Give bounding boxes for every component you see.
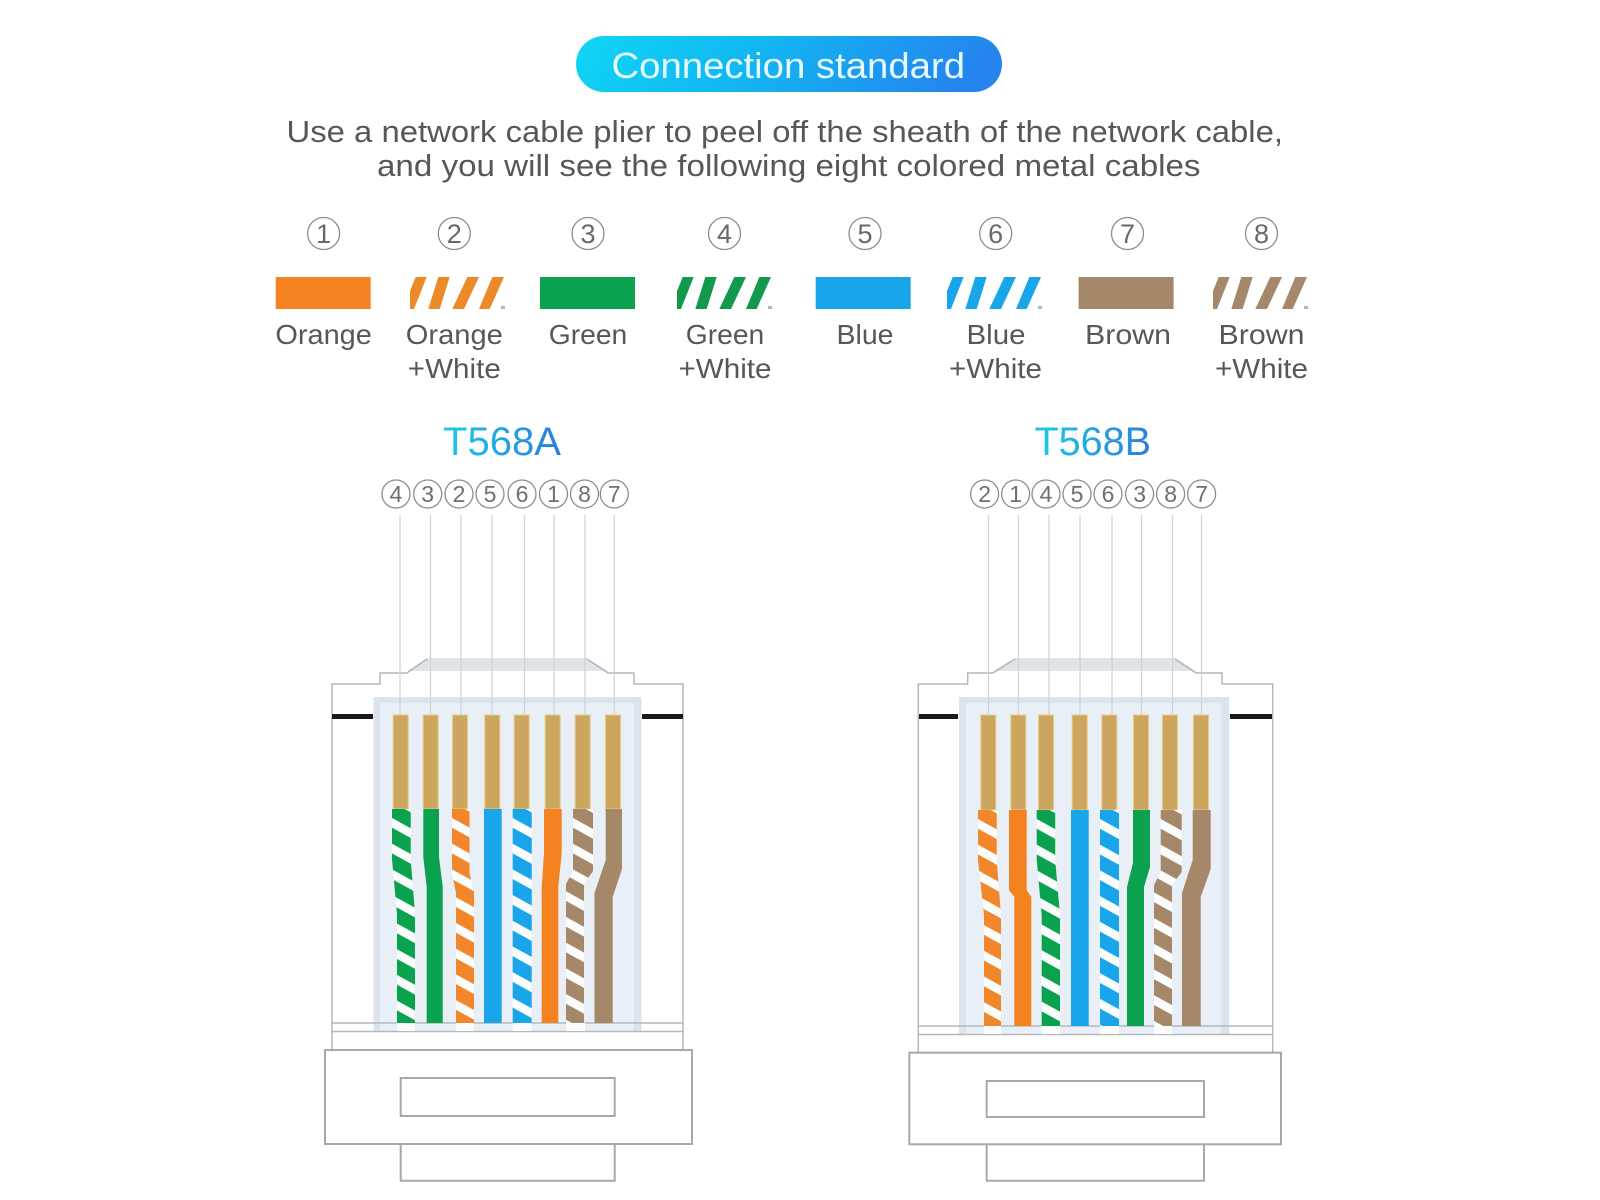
legend item 7: brown	[1079, 218, 1174, 350]
heading: T568B: T568B	[1034, 420, 1151, 464]
T568A pin order numbers: 6	[516, 481, 528, 507]
T568A pin order numbers: 1	[547, 481, 560, 507]
connector A housing	[332, 658, 683, 1050]
legend item 3: green: 3	[580, 219, 596, 249]
intro text: Use a network cable plier to peel off the sheath of the network cable,	[286, 114, 1283, 149]
T568A pin order numbers: 2	[453, 481, 465, 507]
legend item 4: green white: 4	[717, 219, 732, 249]
legend item 1: orange	[275, 218, 372, 350]
legend item 3: green: Green	[549, 319, 627, 350]
legend item 2: orange white: 2	[447, 219, 462, 249]
legend item 7: brown: Brown	[1085, 319, 1171, 350]
legend item 6: blue white: +White	[949, 353, 1042, 384]
connector A base	[325, 1050, 692, 1181]
connector A gold contacts	[393, 715, 620, 809]
T568A pin order numbers: 7	[608, 481, 621, 507]
legend item 8: brown white: +White	[1215, 353, 1308, 384]
T568A pin order numbers: 3	[421, 481, 434, 507]
T568A pin order numbers: 8	[578, 481, 591, 507]
T568A pin order numbers: 4	[390, 481, 403, 507]
connector B housing	[918, 658, 1273, 1053]
legend item 7: brown: 7	[1120, 219, 1135, 249]
T568A pin order numbers: 5	[484, 481, 496, 507]
legend item 1: orange: 1	[316, 219, 331, 249]
T568B pin order numbers: 2	[978, 481, 991, 507]
colour legend	[275, 218, 1308, 384]
connector: T568B	[909, 515, 1281, 1181]
title pill	[576, 36, 1002, 92]
legend item 3: green	[540, 218, 635, 350]
connector B guide lines	[988, 515, 1202, 715]
T568B pin order numbers: 5	[1071, 481, 1083, 507]
legend item 2: orange white	[406, 218, 505, 384]
T568B pin order numbers: 3	[1133, 481, 1146, 507]
T568B pin order numbers	[971, 480, 1216, 508]
legend item 2: orange white: Orange	[406, 319, 503, 350]
heading: T568A: T568A	[443, 420, 561, 464]
legend item 6: blue white: Blue	[966, 319, 1026, 350]
T568B pin order numbers: 4	[1040, 481, 1053, 507]
connector A guide lines	[400, 515, 614, 715]
T568B pin order numbers: 8	[1164, 481, 1177, 507]
legend item 4: green white: +White	[678, 353, 772, 384]
legend item 5: blue: 5	[857, 219, 873, 249]
connector B wires	[978, 810, 1211, 1034]
T568B pin order numbers: 7	[1195, 481, 1208, 507]
connector B base	[909, 1053, 1281, 1181]
legend item 4: green white	[677, 218, 772, 384]
legend item 8: brown white	[1213, 218, 1308, 384]
legend item 8: brown white: 8	[1254, 219, 1269, 249]
connector A wires	[392, 809, 622, 1031]
legend item 4: green white: Green	[686, 319, 764, 350]
legend item 5: blue	[816, 218, 911, 350]
legend item 5: blue: Blue	[836, 319, 894, 350]
legend item 6: blue white	[947, 218, 1042, 384]
intro text	[286, 114, 1283, 183]
legend item 6: blue white: 6	[988, 219, 1003, 249]
legend item 8: brown white: Brown	[1218, 319, 1304, 350]
T568B pin order numbers: 1	[1009, 481, 1022, 507]
intro text: and you will see the following eight colored metal cables	[377, 148, 1200, 183]
T568B pin order numbers: 6	[1102, 481, 1114, 507]
title pill: Connection standard	[612, 45, 965, 86]
legend item 2: orange white: +White	[408, 353, 501, 384]
connector B gold contacts	[981, 715, 1208, 810]
connector: T568A	[325, 515, 692, 1181]
T568A pin order numbers	[382, 480, 628, 508]
legend item 1: orange: Orange	[275, 319, 372, 350]
